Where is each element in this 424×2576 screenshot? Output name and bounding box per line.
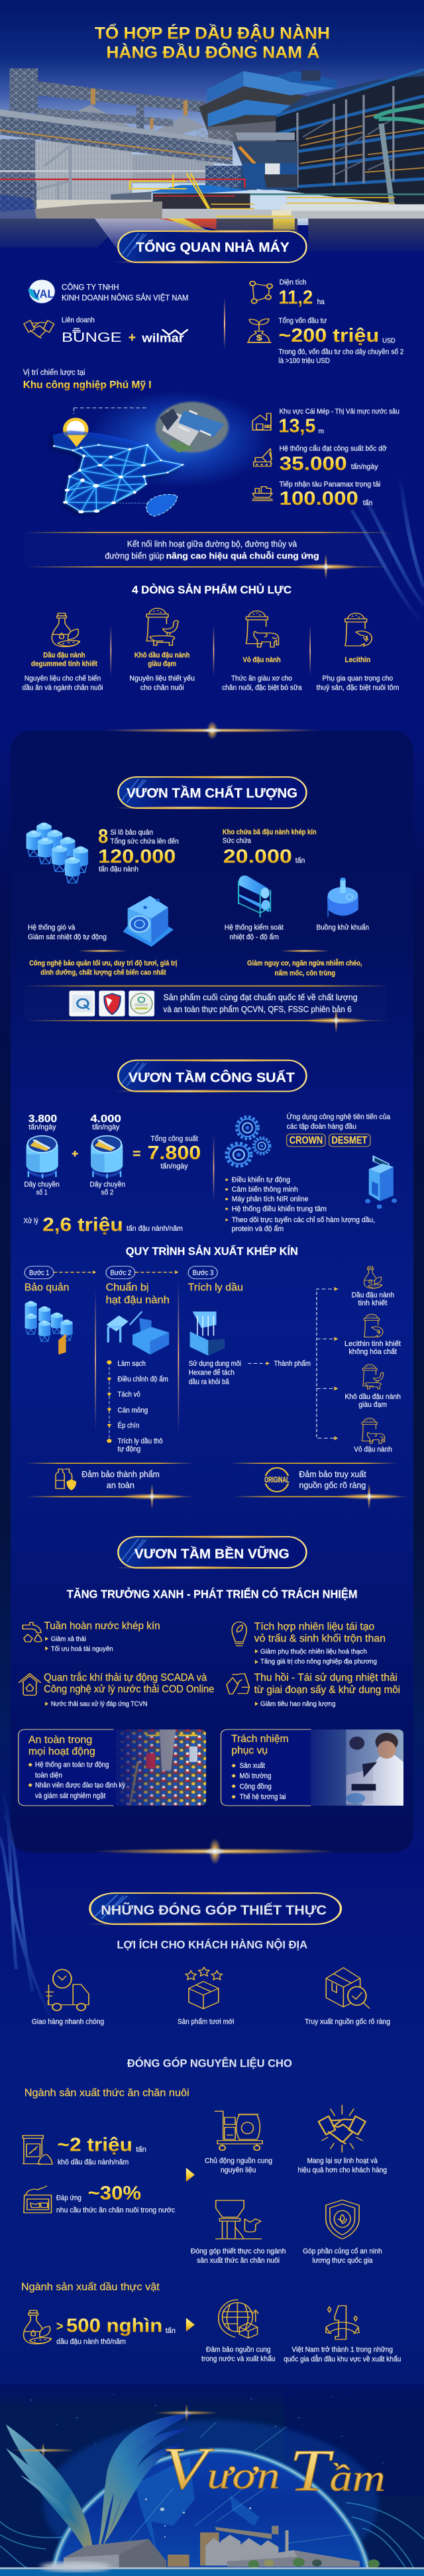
illustration: sterilization chamber (327, 878, 358, 917)
icon: gears (227, 1117, 270, 1166)
item: renewable fuel: Tăng giá trị cho nông nghiệp địa phương (260, 1659, 377, 1665)
callout: product safety: Đảm bảo thành phẩm (81, 1469, 160, 1479)
stat: annual processing: Xử lý (24, 1217, 38, 1225)
factory scene (64, 2526, 380, 2569)
item: heat recovery (227, 1671, 400, 1708)
icon: oil output (364, 1266, 382, 1288)
benefit: traceability: Truy xuất nguồn gốc rõ ràng (305, 2018, 390, 2026)
heading: four product lines: 4 DÒNG SẢN PHẨM CHỦ LỰC (132, 584, 292, 596)
heading pill: sustainability: VƯƠN TẦM BỀN VỮNG (134, 1545, 290, 1561)
callout: certifications: Sản phẩm cuối cùng đạt chuẩn quốc tế về chất lượng (164, 992, 358, 1002)
output: hulls: Vỏ đậu nành (354, 1445, 392, 1453)
callout: connectivity: Kết nối linh hoạt giữa đường bộ, đường thủy và (127, 539, 297, 548)
preparation timeline: Cán mỏng (118, 1406, 148, 1414)
captions: systems: Buồng khử khuẩn (317, 923, 369, 931)
heading: domestic customer benefits: LỢI ÍCH CHO KHÁCH HÀNG NỘI ĐỊA (117, 1938, 307, 1951)
step 1 header (25, 1266, 96, 1293)
stat: crane capacity: tấn/ngày (351, 462, 378, 471)
heading pill: quality: VƯƠN TẦM CHẤT LƯỢNG (127, 784, 297, 800)
heading: closed process: QUY TRÌNH SẢN XUẤT KHÉP KÍN (126, 1245, 298, 1257)
benefit: fast delivery: Giao hàng nhanh chóng (32, 2018, 104, 2026)
automation list: Máy phân tích NIR online (232, 1195, 309, 1203)
production line 1: tấn/ngày (28, 1123, 56, 1131)
production line 1 (24, 1113, 60, 1196)
item: water recycling: Tối ưu hoá tài nguyên (51, 1645, 113, 1653)
product 3 text (222, 655, 302, 692)
automation list: protein và độ ẩm (232, 1224, 284, 1233)
extraction description: dầu ra khỏi bã (189, 1377, 229, 1386)
benefit: flexibility: hiệu quả hơn cho khách hàng (297, 2166, 387, 2174)
stat: Panamax ship: tấn (363, 498, 372, 507)
band: benefits and raw materials (23, 1967, 390, 2182)
product 1 text: Nguyên liệu cho chế biến (25, 674, 101, 682)
card: responsibility: Cộng đồng (240, 1782, 272, 1790)
joint venture logos: Liên doanh (62, 316, 95, 324)
stat: investment (247, 317, 404, 365)
heading pill: plant overview (112, 230, 306, 264)
item: emissions monitoring: Công nghệ xử lý nước thải COD Online (44, 1683, 214, 1695)
heading pill: capacity (112, 1059, 306, 1093)
product 2 text: Khô dầu đậu nành (134, 651, 190, 659)
card: operational safety: và giám sát nghiêm ngặt (35, 1791, 106, 1800)
quality benefits (29, 958, 362, 977)
preparation timeline: Làm sạch (118, 1359, 146, 1368)
callout: product safety: an toàn (107, 1480, 134, 1490)
production line 1: 3.800 (28, 1113, 57, 1125)
illustration: eight silos (26, 823, 88, 883)
captions: systems: Giám sát nhiệt độ tự động (28, 933, 107, 941)
extraction description: Thành phẩm (274, 1359, 311, 1368)
heading: animal feed sector: Ngành sản xuất thức ăn chăn nuôi (25, 2087, 189, 2098)
automation list: Điều khiển tự động (232, 1175, 290, 1184)
callout: product safety (26, 1463, 195, 1510)
stat: crane capacity: 35.000 (280, 452, 347, 474)
joint venture logos: wilmar (141, 332, 184, 345)
stat: meal warehouse (223, 827, 317, 867)
step 2 header (106, 1266, 178, 1306)
stat: area (250, 278, 325, 308)
stat: meal warehouse: Sức chứa (223, 837, 251, 845)
hero photo lower ground (0, 219, 424, 256)
production line 1: Dây chuyền (24, 1180, 60, 1188)
stat: crane capacity: Hệ thống cẩu đạt công suất bốc dỡ (280, 444, 387, 452)
output: hulls (354, 1418, 392, 1453)
illustration: temperature and humidity control (238, 876, 270, 917)
benefit: flexibility (297, 2105, 387, 2174)
product 1 text: degummed tinh khiết (31, 659, 97, 668)
total capacity: Tổng công suất (150, 1134, 198, 1143)
quality benefits: nấm mốc, côn trùng (275, 968, 335, 977)
callout: connectivity (25, 532, 392, 580)
product 3 text: chăn nuôi, đặc biệt bò sữa (222, 684, 302, 692)
callout: traceability (230, 1463, 408, 1510)
callout: traceability: nguồn gốc rõ ràng (299, 1480, 366, 1490)
card: operational safety: mọi hoạt động (28, 1745, 95, 1757)
joint venture logos: BUNGE (62, 330, 122, 344)
output: meal: giàu đạm (358, 1400, 387, 1409)
step 2 header: Bước 2 (111, 1268, 132, 1277)
script title: Vươn (162, 2435, 280, 2501)
stat: water depth (252, 407, 399, 437)
product 2 text: giàu đạm (148, 659, 176, 668)
stat: silo capacity: Tổng sức chứa lên đến (111, 837, 179, 845)
card: operational safety (19, 1729, 206, 1806)
feather leaves (6, 2404, 219, 2565)
band: products and quality heading (22, 651, 399, 883)
card: responsibility: Môi trường (240, 1771, 271, 1780)
item: water recycling: Giảm xả thải (51, 1635, 86, 1643)
logo: VAL (28, 280, 55, 303)
stat: feed demand: nhu cầu thức ăn chăn nuôi trong nước (56, 2206, 175, 2214)
stat: silo capacity: 120.000 (98, 846, 176, 867)
card: responsibility: Sản xuất (240, 1761, 266, 1770)
stat: silo capacity: 8 (98, 826, 108, 848)
title (95, 23, 330, 62)
production line 2: Dây chuyền (90, 1180, 125, 1188)
heading pill: sustainability (112, 1535, 306, 1569)
company name (62, 283, 188, 302)
step 2 header: hạt đậu nành (106, 1294, 170, 1306)
icon: lecithin shrimp (345, 613, 372, 646)
output label: oil (352, 1291, 394, 1307)
item: water recycling: Tuần hoàn nước khép kín (44, 1620, 160, 1631)
product 4 text (317, 656, 399, 692)
preparation timeline: tự động (118, 1445, 140, 1453)
quality benefits: Công nghệ bảo quản tối ưu, duy trì độ tươi, giá trị (29, 959, 177, 967)
equals sign (133, 1152, 140, 1155)
panel: three pillars background (11, 731, 413, 1853)
heading pill: contributions (82, 1892, 341, 1926)
band: sustainability (19, 1535, 403, 1806)
stat: investment: Tổng vốn đầu tư (278, 317, 327, 325)
stat: crude oil: tấn (166, 2326, 176, 2335)
benefit: supply and export: Đảm bảo nguồn cung (206, 2345, 271, 2353)
icon: soybean meal animals (146, 608, 178, 645)
illustration: extraction machine (190, 1312, 225, 1356)
heading: raw material contribution: ĐÓNG GÓP NGUYÊN LIỆU CHO (127, 2057, 292, 2069)
stat: area: 11,2 (278, 286, 313, 308)
stat: water depth: 13,5 (278, 415, 315, 437)
item: emissions monitoring (19, 1671, 214, 1708)
stat: investment: là >100 triệu USD (278, 356, 330, 365)
title: TỔ HỢP ÉP DẦU ĐẬU NÀNH (95, 23, 330, 42)
heading: vegetable oil sector: Ngành sản xuất dầu thực vật (21, 2281, 160, 2293)
arrow: feed sector (186, 2168, 195, 2182)
stat: Panamax ship (252, 480, 380, 509)
automation list: Theo dõi trực tuyến các chỉ số hàm lượng dầu, (232, 1215, 375, 1224)
stat: silo capacity: Si lô bảo quản (111, 828, 153, 837)
stat: annual processing (24, 1213, 183, 1235)
logo: VAL: VAL (33, 287, 54, 301)
product 2 text (130, 651, 195, 692)
strategic location text (23, 368, 152, 391)
map glow and factory aerial (65, 391, 270, 488)
stat: investment: USD (382, 337, 396, 344)
card: responsibility (221, 1729, 403, 1806)
product 1 text (22, 651, 103, 692)
step 1 header: Bảo quản (25, 1281, 69, 1293)
callout: connectivity: đường biển giúp (105, 551, 164, 560)
output branch arrows (317, 1287, 338, 1440)
footer dimming overlay (0, 2385, 424, 2576)
benefit: food security: Góp phần củng cố an ninh (303, 2247, 382, 2255)
benefit: supply and export (201, 2300, 276, 2363)
item: heat recovery: Giảm tiêu hao năng lượng (260, 1701, 336, 1708)
product 2 text: cho chăn nuôi (140, 684, 184, 692)
stat: investment: $ (256, 333, 263, 342)
arrow: oil sector (186, 2318, 195, 2332)
product 4 text: Lecithin (344, 656, 370, 664)
heading pill: capacity: VƯƠN TẦM CÔNG SUẤT (129, 1069, 295, 1085)
band: contributions heading (0, 1786, 341, 2025)
card: responsibility: phục vụ (231, 1744, 268, 1756)
footer artwork: Vươn Tầm (0, 2385, 424, 2576)
benefit: regional leader: Việt Nam trở thành 1 trong những (292, 2345, 393, 2353)
stat: soybean meal: tấn (136, 2145, 146, 2153)
stat: soybean meal: khô dầu đậu nành/năm (58, 2157, 129, 2166)
total capacity: 7.800 (147, 1142, 201, 1163)
stat: crude oil: > (56, 2318, 64, 2334)
icon: handshake (24, 321, 54, 338)
item: renewable fuel: Tích hợp nhiên liệu tái tạo (254, 1620, 374, 1632)
benefit: food security (303, 2200, 382, 2265)
stat: crude oil: dầu đậu nành thô/năm (56, 2338, 126, 2345)
item: heat recovery: Thu hồi - Tái sử dụng nhiệt thải (254, 1671, 398, 1683)
card: operational safety: toàn diện (35, 1771, 62, 1779)
item: emissions monitoring: Quan trắc khí thải tự động SCADA và (44, 1671, 207, 1683)
step 2 header: Chuẩn bị (106, 1281, 148, 1293)
quality benefits: dinh dưỡng, chất lượng chế biến cao nhất (40, 968, 166, 976)
output: lecithin (344, 1314, 401, 1356)
product 2 text: Nguyên liệu thiết yếu (130, 674, 195, 682)
joint venture logos: + (129, 329, 136, 344)
band: quality details (25, 876, 390, 1093)
stat: area: ha (317, 297, 325, 306)
stat: feed demand: ~30% (88, 2183, 141, 2204)
script title (162, 2435, 386, 2504)
stat: feed demand: Đáp ứng (56, 2194, 81, 2202)
card: operational safety: Nhân viên được đào tạo định kỳ (35, 1780, 125, 1789)
callout: connectivity: nâng cao hiệu quả chuỗi cung ứng (166, 551, 319, 560)
total capacity: tấn/ngày (160, 1162, 188, 1170)
stat: silo capacity (98, 826, 179, 873)
light waves (0, 2502, 424, 2568)
illustration: storage silos (25, 1301, 73, 1355)
benefit: feed industry: sản xuất thức ăn chăn nuôi (197, 2256, 280, 2265)
output: lecithin: Lecithin tinh khiết (344, 1339, 401, 1348)
automation list: Hệ thống điều khiển trung tâm (232, 1204, 327, 1213)
technology partners (287, 1112, 390, 1147)
benefit: fresh products: Sản phẩm tươi mới (178, 2018, 234, 2026)
product 3 text: Thức ăn giàu xơ cho (231, 674, 292, 682)
output label: oil: tinh khiết (358, 1299, 388, 1307)
extraction description: Sử dụng dung môi (189, 1359, 241, 1368)
preparation timeline: Trích ly dầu thô (118, 1437, 163, 1445)
stat: meal warehouse: Kho chứa bã đậu nành khép kín (223, 827, 317, 836)
stat: crude oil (56, 2315, 176, 2345)
total capacity (147, 1134, 201, 1170)
captions: systems: Hệ thống gió và (28, 923, 76, 931)
output label: oil: Dầu đậu nành (352, 1291, 394, 1299)
stat: soybean meal (23, 2134, 146, 2166)
production line 2: số 2 (101, 1188, 114, 1196)
benefit: regional leader (284, 2306, 401, 2363)
benefit: food security: lương thực quốc gia (312, 2256, 373, 2265)
plus sign (72, 1151, 78, 1157)
captions: systems: nhiệt độ - độ ẩm (230, 933, 279, 941)
production line 2 (90, 1113, 125, 1196)
strategic location text: Vị trí chiến lược tại (23, 368, 85, 377)
benefit: feed industry (191, 2200, 286, 2265)
decorative streaks left (0, 1786, 54, 2025)
technology partners: CROWN (290, 1134, 323, 1146)
benefit: traceability (305, 1968, 390, 2026)
icon: soybean hulls cow (246, 611, 278, 647)
panel top flare (102, 721, 323, 740)
callout: traceability: ORIGINAL (264, 1475, 290, 1484)
stat: Panamax ship: 100.000 (280, 488, 358, 509)
item: renewable fuel: vỏ trấu & sinh khối trộn than (254, 1632, 386, 1644)
heading pill: contributions: NHỮNG ĐÓNG GÓP THIẾT THỰC (101, 1902, 327, 1918)
extraction description: Hexane để tách (189, 1368, 235, 1376)
output: lecithin: không hóa chất (349, 1347, 397, 1356)
stat: water depth: m (318, 428, 324, 435)
illustration: preparation machinery (106, 1312, 169, 1355)
band: capacity (24, 1112, 397, 1435)
icon: crude oil bottle (24, 2310, 52, 2344)
benefit: proactive supply: Chủ động nguồn cung (205, 2157, 272, 2165)
script title: Tầm (290, 2437, 386, 2504)
company name: KINH DOANH NÔNG SẢN VIỆT NAM (62, 293, 188, 302)
benefit: feed industry: Đóng góp thiết thực cho ngành (191, 2247, 286, 2255)
preparation timeline (107, 1359, 168, 1453)
card: operational safety: An toàn trong (28, 1733, 92, 1745)
automation list (225, 1175, 375, 1233)
decorative light streaks right (352, 475, 424, 625)
captions: systems (28, 923, 369, 941)
illustration: control machine (365, 1155, 397, 1209)
step 1 header: Bước 1 (29, 1268, 50, 1277)
illustration: ventilation unit (123, 896, 174, 947)
stat: meal warehouse: tấn (295, 856, 305, 864)
callout: traceability: Đảm bảo truy xuất (299, 1469, 366, 1479)
card: responsibility: Thế hệ tương lai (240, 1792, 286, 1801)
hero photo: soybean plant (0, 68, 424, 219)
stat: crane capacity (254, 444, 387, 474)
technology partners: các tập đoàn hàng đầu (287, 1122, 356, 1131)
hero sky (0, 0, 424, 225)
production line 2: 4.000 (90, 1113, 121, 1125)
production line 2: tấn/ngày (92, 1123, 119, 1131)
benefit: supply and export: trong nước và xuất khẩu (201, 2354, 276, 2363)
callout: certifications: và an toàn thực phẩm QCVN, QFS, FSSC phiên bản 6 (164, 1004, 352, 1014)
benefit: proactive supply (205, 2111, 272, 2174)
water and horizon (0, 2562, 424, 2576)
step 3 header: Trích ly dầu (188, 1281, 243, 1293)
product 1 text: dầu ăn và ngành chăn nuôi (22, 684, 103, 692)
card: operational safety: Hệ thống an toàn tự động (35, 1761, 109, 1769)
benefit: fresh products (178, 1967, 234, 2026)
globe dome (54, 2422, 368, 2568)
band: feed and vegetable oil (21, 2183, 401, 2363)
production line 1: số 1 (36, 1188, 48, 1196)
item: renewable fuel: Giảm phụ thuộc nhiên liệu hoá thạch (260, 1648, 367, 1655)
heading pill: quality (112, 776, 306, 809)
output: meal (344, 1365, 401, 1409)
stat: annual processing: 2,6 triệu (42, 1213, 123, 1235)
step 3 header: Bước 3 (193, 1268, 214, 1277)
map: network of Vietnam south (52, 431, 184, 516)
product 3 text: Vỏ đậu nành (243, 655, 281, 664)
card: responsibility: Trách nhiệm (231, 1733, 289, 1745)
benefit: proactive supply: nguyên liệu (221, 2166, 256, 2174)
benefit: flexibility: Mang lại sự linh hoạt và (307, 2157, 378, 2165)
item: water recycling (23, 1620, 160, 1653)
preparation timeline: Tách vỏ (118, 1390, 140, 1398)
stat: crude oil: 500 nghìn (66, 2315, 162, 2336)
benefit: fast delivery (32, 1969, 104, 2026)
captions: systems: Hệ thống kiểm soát (225, 923, 284, 931)
extraction description (189, 1359, 311, 1386)
product 4 text: thuỷ sản, đặc biệt nuôi tôm (317, 684, 399, 692)
stat: area: Diện tích (280, 278, 306, 286)
joint venture logos (62, 316, 188, 345)
item: renewable fuel (232, 1620, 386, 1665)
strategic location text: Khu công nghiệp Phú Mỹ I (23, 379, 152, 391)
band: process details (25, 1287, 408, 1510)
band: location and products (25, 431, 424, 676)
stat: investment: ~200 triệu (278, 325, 379, 346)
company name: CÔNG TY TNHH (62, 283, 119, 291)
icon: soybean oil (52, 613, 80, 646)
stat: feed demand (24, 2183, 175, 2214)
stat: meal warehouse: 20.000 (223, 846, 292, 867)
preparation timeline: Ép chín (118, 1421, 139, 1429)
step 3 header (188, 1266, 243, 1293)
stat: silo capacity: tấn đậu nành (99, 864, 138, 873)
output: meal: Khô dầu đậu nành (344, 1392, 401, 1401)
heading pill: plant overview: TỔNG QUAN NHÀ MÁY (136, 238, 290, 254)
product 1 text: Dầu đậu nành (43, 651, 85, 659)
title: HÀNG ĐẦU ĐÔNG NAM Á (106, 42, 319, 62)
stat: soybean meal: ~2 triệu (58, 2134, 132, 2155)
technology partners: DESMET (331, 1134, 368, 1146)
item: emissions monitoring: Nước thải sau xử lý đáp ứng TCVN (51, 1701, 147, 1708)
quality benefits: Giảm nguy cơ, ngăn ngừa nhiễm chéo, (247, 958, 362, 967)
product 4 text: Phụ gia quan trọng cho (323, 674, 393, 682)
automation list: Cảm biến thông minh (232, 1185, 298, 1194)
preparation timeline: Điều chỉnh độ ẩm (118, 1374, 168, 1383)
callout: certifications (25, 986, 390, 1034)
stat: annual processing: tấn đậu nành/năm (127, 1224, 183, 1233)
stat: Panamax ship: Tiếp nhận tàu Panamax trọng tải (280, 480, 380, 488)
band: plant overview top (0, 219, 424, 488)
technology partners: Ứng dụng công nghệ tiên tiến của (287, 1112, 390, 1121)
footer background (0, 2385, 424, 2576)
panel bottom flare (91, 1838, 339, 1865)
